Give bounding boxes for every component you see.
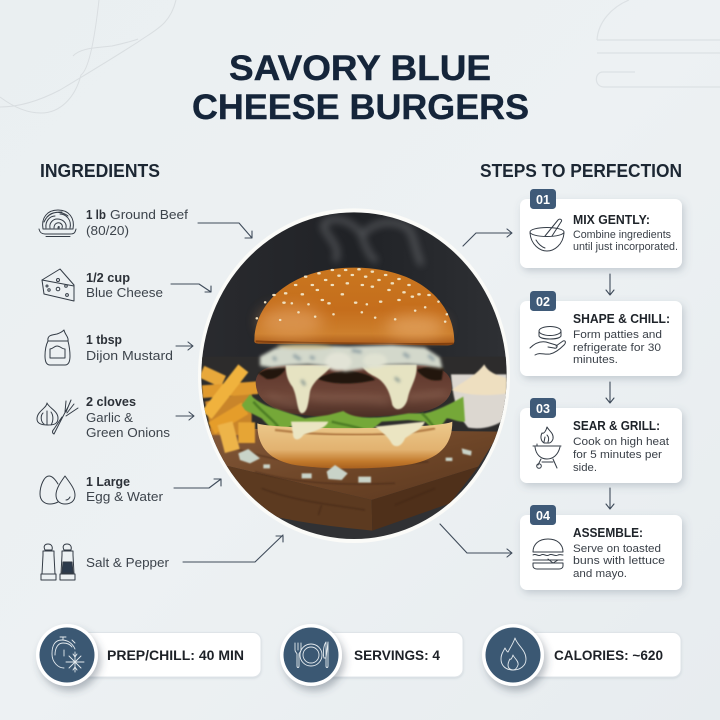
title <box>192 49 529 127</box>
step 2 card: SHAPE & CHILL: <box>573 312 670 326</box>
step 4 card: Serve on toasted <box>573 543 661 555</box>
ingredient: garlic and green onions: Garlic & <box>86 410 133 425</box>
title: CHEESE BURGERS <box>192 88 529 127</box>
cheese crumbs on board <box>238 448 472 483</box>
step 1 card: Combine ingredients <box>573 229 671 241</box>
step 4 badge <box>530 505 556 525</box>
bottom bun <box>257 422 452 468</box>
arrow: burger to step 1 <box>463 229 512 246</box>
step 3 badge: 03 <box>536 402 550 416</box>
patty <box>256 365 452 417</box>
arrow: mustard to burger <box>176 342 193 350</box>
ingredient: garlic and green onions <box>37 394 171 440</box>
icon: patty on hand <box>530 326 565 355</box>
ingredient: ground beef: (80/20) <box>86 223 129 238</box>
icon: flame <box>501 638 526 670</box>
ingredient: egg and water <box>40 474 164 504</box>
step 4 card: buns with lettuce <box>573 555 665 567</box>
blue cheese crumbles <box>260 344 442 385</box>
arrow: garlic to burger <box>176 412 194 420</box>
ingredient: ground beef: Ground Beef <box>110 207 188 222</box>
photo scene <box>195 205 515 552</box>
step 4 card: ASSEMBLE: <box>573 526 643 540</box>
step 4 badge: 04 <box>536 509 550 523</box>
ingredient: garlic and green onions: 2 cloves <box>86 394 136 409</box>
arrow: step 2 to 3 <box>606 382 614 403</box>
ingredient: ground beef <box>39 207 188 238</box>
ingredient: blue cheese <box>42 269 163 301</box>
stat: servings: SERVINGS: 4 <box>354 648 440 663</box>
ingredient: dijon mustard <box>45 330 173 365</box>
arrow: blue cheese to burger <box>171 284 211 292</box>
wooden board <box>208 428 500 531</box>
stat: calories: CALORIES: ~620 <box>554 648 663 663</box>
step 3 card <box>520 398 682 483</box>
step 2 badge <box>530 291 556 311</box>
step 2 card: Form patties and <box>573 329 662 341</box>
icon: stopwatch and snowflake <box>52 637 84 672</box>
arrow: ground beef to burger <box>198 223 252 238</box>
ingredient: dijon mustard: 1 tbsp <box>86 332 122 347</box>
stat: prep and chill time <box>36 624 261 686</box>
step 2 card: minutes. <box>573 354 618 366</box>
step 2 card <box>520 291 682 376</box>
step 1 card: until just incorporated. <box>573 241 678 253</box>
burger photo <box>195 205 515 552</box>
title: SAVORY BLUE <box>229 49 491 88</box>
panel: steps <box>480 161 682 590</box>
lettuce <box>241 394 466 428</box>
icon: ground beef <box>39 210 76 236</box>
step 1 badge <box>530 189 556 209</box>
step 1 card <box>520 189 682 268</box>
decorative swirl lines <box>0 0 176 113</box>
step 4 card <box>520 505 682 590</box>
step 3 card: Cook on high heat <box>573 436 669 448</box>
icon: grill <box>533 427 561 468</box>
heading: steps to perfection: STEPS TO PERFECTION <box>480 161 682 181</box>
arrow: step 1 to 2 <box>606 274 614 295</box>
arrow: egg to burger <box>174 479 221 488</box>
icon: garlic and onions <box>37 400 78 434</box>
ingredient: blue cheese: 1/2 cup <box>86 270 130 285</box>
heading: ingredients: INGREDIENTS <box>40 161 160 181</box>
stat: prep and chill time: PREP/CHILL: 40 MIN <box>107 648 244 663</box>
step 3 card: side. <box>573 462 597 474</box>
ingredient: garlic and green onions: Green Onions <box>86 425 171 440</box>
ingredient: egg and water: 1 Large <box>86 474 130 489</box>
stat: calories <box>482 624 681 686</box>
arrow: step 3 to 4 <box>606 488 614 509</box>
ingredient: blue cheese: Blue Cheese <box>86 285 163 300</box>
steam <box>323 219 422 265</box>
icon: burger <box>533 539 563 569</box>
icon: plate and cutlery <box>295 642 328 668</box>
decorative burger outline <box>596 0 720 87</box>
step 3 card: for 5 minutes per <box>573 449 662 461</box>
step 1 card: MIX GENTLY: <box>573 213 650 227</box>
step 2 badge: 02 <box>536 295 550 309</box>
panel: ingredients <box>37 161 188 580</box>
icon: cheese wedge <box>42 269 74 301</box>
photo frame <box>198 208 510 543</box>
step 1 badge: 01 <box>536 193 550 207</box>
icon: shakers <box>41 544 75 580</box>
ingredient: salt and pepper <box>41 544 170 580</box>
melted cheese <box>286 364 417 413</box>
step 3 card: SEAR & GRILL: <box>573 419 660 433</box>
icon: eggs <box>40 476 75 504</box>
arrow: salt and pepper to burger <box>183 535 283 562</box>
arrow: burger to step 4 <box>440 524 512 557</box>
top bun <box>254 268 454 345</box>
fries <box>202 368 258 451</box>
ingredient: salt and pepper: Salt & Pepper <box>86 555 170 570</box>
mayo bowl <box>451 364 507 428</box>
step 4 card: and mayo. <box>573 568 627 580</box>
icon: mustard jar <box>45 330 70 365</box>
ingredient: ground beef: 1 lb <box>86 207 106 222</box>
ingredient: dijon mustard: Dijon Mustard <box>86 348 173 363</box>
icon: mixing bowl <box>530 219 564 251</box>
step 3 badge <box>530 398 556 418</box>
step 2 card: refrigerate for 30 <box>573 342 661 354</box>
ingredient: egg and water: Egg & Water <box>86 489 164 504</box>
sesame seeds <box>257 269 447 322</box>
stat: servings <box>280 624 463 686</box>
